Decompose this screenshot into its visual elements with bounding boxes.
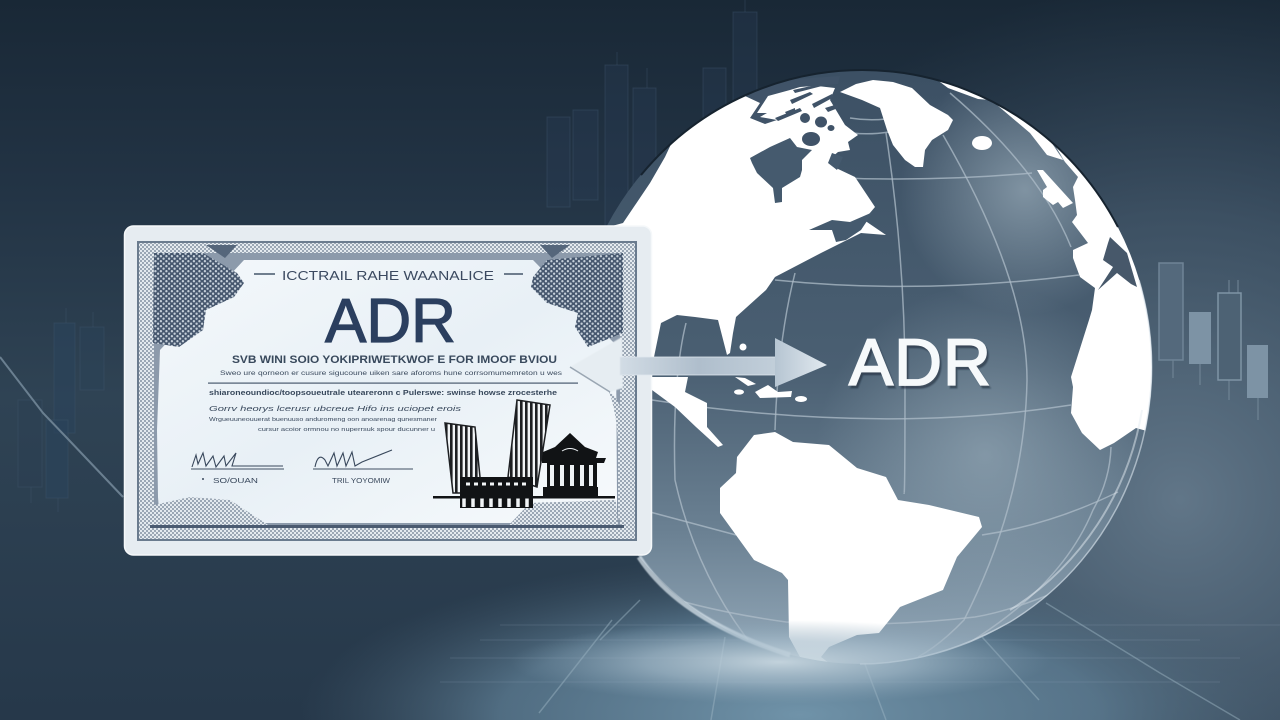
signature: right bbox=[313, 450, 413, 485]
certificate title: ADR bbox=[325, 287, 456, 356]
Hudson Bay bbox=[750, 138, 812, 203]
globe bbox=[607, 69, 1152, 665]
certificate text lines: shiaroneoundioc/toopsoueutrale uteareronn c Pulerswe: swinse howse zrocesterhe bbox=[209, 390, 557, 397]
candlestick chart: left bbox=[18, 308, 104, 512]
globe rim bbox=[639, 70, 1152, 664]
continents bbox=[614, 80, 1152, 662]
certificate text lines: Sweo ure qorneon er cusure sigucoune uiken sare aforoms hune corrsomumemreton u wes bbox=[220, 371, 562, 377]
candlestick chart: centre bbox=[547, 0, 757, 230]
corner: bottom right bbox=[509, 500, 618, 525]
arrow bbox=[570, 337, 827, 392]
certificate text lines bbox=[208, 354, 578, 433]
label: ADR on globe: ADR bbox=[851, 328, 994, 402]
side guilloche bands bbox=[143, 345, 626, 520]
left arrow head bbox=[570, 337, 623, 392]
arrow shaft bbox=[620, 357, 778, 375]
North America bbox=[614, 86, 886, 447]
corner: top right bbox=[531, 253, 623, 347]
signature: left bbox=[191, 453, 284, 485]
trend line bbox=[0, 357, 123, 497]
Caribbean islands bbox=[755, 385, 792, 398]
Mediterranean bbox=[1098, 237, 1137, 290]
certificate text lines: Wrgueuuneouuerat buenuuso anduromeng oon anoarenag qunesmaner bbox=[209, 417, 437, 423]
Iceland bbox=[972, 136, 992, 150]
floor glow bbox=[510, 620, 1050, 704]
label: ADR on globe: ADR bbox=[849, 325, 992, 399]
signature: left: SO/OUAN bbox=[213, 478, 258, 485]
Europe, Africa bbox=[1056, 148, 1152, 450]
panel: ADR certificate bbox=[124, 226, 652, 555]
South America bbox=[720, 432, 982, 663]
signature: right: TRIL YOYOMIW bbox=[332, 478, 390, 485]
James Bay side bbox=[828, 153, 838, 170]
right arrow head bbox=[775, 338, 827, 387]
candlestick chart: right bbox=[1159, 263, 1268, 420]
Europe strips bbox=[940, 82, 986, 100]
ornate frame bbox=[138, 242, 636, 540]
card bbox=[124, 226, 652, 555]
corner: bottom left bbox=[154, 497, 268, 525]
graticule lines bbox=[640, 93, 1125, 657]
Gulf of St Lawrence bbox=[809, 212, 873, 242]
British Isles bbox=[1037, 170, 1073, 208]
floor grid bbox=[440, 600, 1280, 720]
corner: top left bbox=[153, 253, 244, 347]
certificate text lines: cursur acoior ormnou no nuperrsuk spour ducunner u bbox=[258, 427, 435, 433]
paper bbox=[157, 260, 617, 523]
icon: buildings bbox=[433, 400, 615, 508]
certificate text lines: Gorrv heorys lcerusr ubcreue Hifo ins uciopet erois bbox=[209, 404, 461, 413]
Arctic islands gaps bbox=[746, 84, 836, 146]
globe sphere bbox=[572, 70, 1152, 664]
certificate heading: ICCTRAIL RAHE WAANALICE bbox=[282, 268, 494, 283]
certificate text lines: SVB WINI SOIO YOKIPRIWETKWOF E FOR IMOOF BVIOU bbox=[232, 354, 557, 366]
Greenland bbox=[840, 80, 953, 167]
